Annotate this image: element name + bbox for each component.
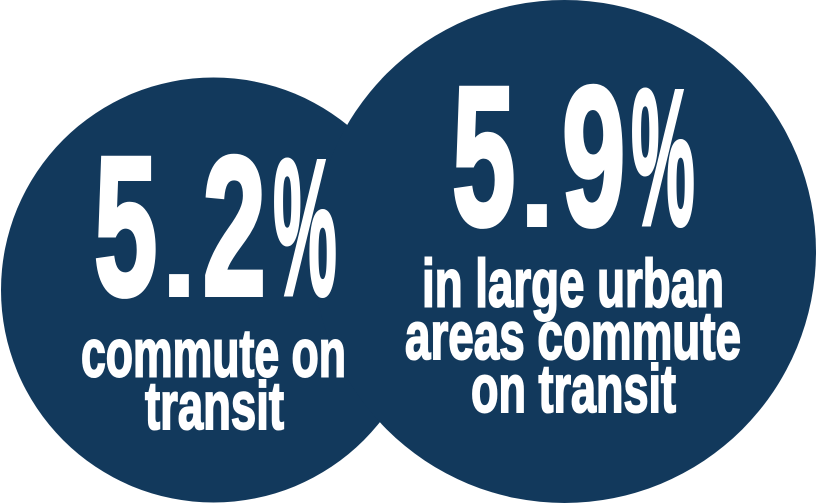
caption: commute on transit: transit — [145, 368, 284, 444]
statistic: 5.9% — [452, 46, 695, 266]
panel: left circle text, national commute share — [81, 116, 346, 444]
caption: in large urban areas commute on transit: on transit — [471, 351, 676, 427]
infographic: overlapping transit statistic circles: % — [273, 120, 337, 336]
statistic: 5.9%: 9 — [562, 46, 625, 266]
statistic: 5.2%: . — [164, 186, 194, 320]
panel: right circle text, large urban areas commute share — [405, 46, 741, 427]
statistic: 5.9%: 5 — [452, 46, 515, 266]
panel: right circle text, large urban areas commute share: % — [631, 50, 695, 266]
caption: commute on transit — [81, 316, 346, 444]
statistic: 5.2% — [94, 116, 337, 336]
caption: in large urban areas commute on transit — [405, 246, 741, 427]
statistic: 5.2%: 5 — [94, 116, 157, 336]
caption: commute on transit: commute on — [81, 316, 346, 392]
statistic: 5.9%: . — [522, 116, 552, 250]
statistic: 5.2%: 2 — [203, 116, 266, 336]
